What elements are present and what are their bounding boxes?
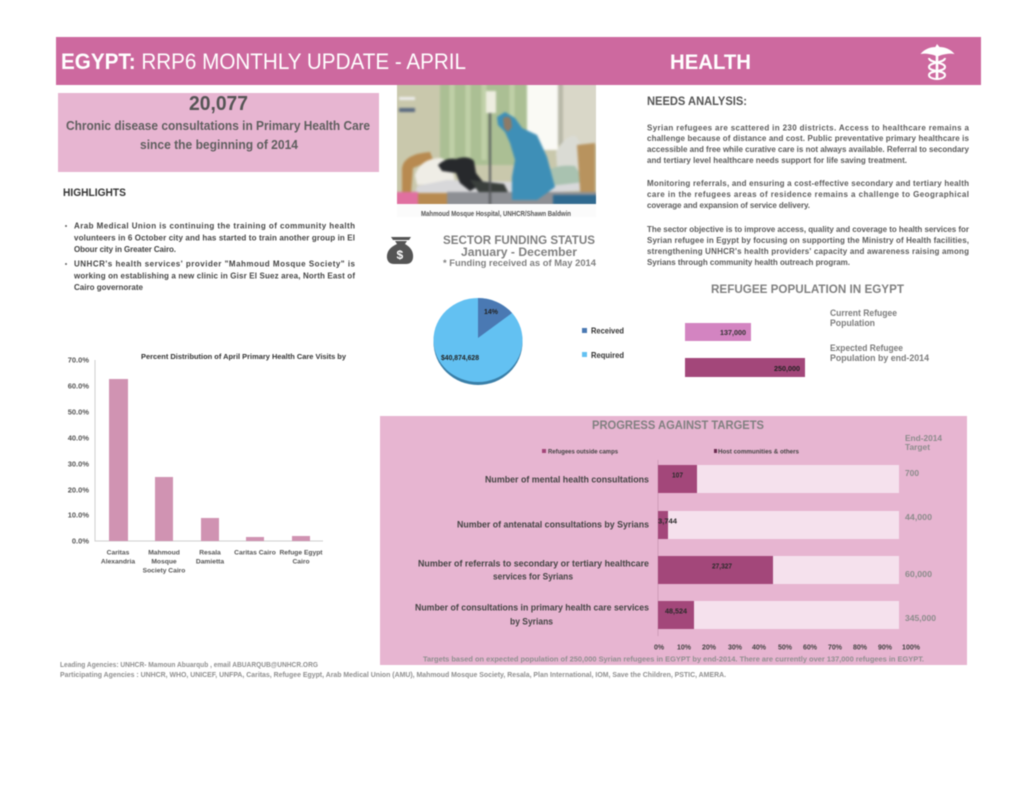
text block: needs analysis: coverage and expansion of service delivery. [647, 201, 810, 210]
text block: needs analysis: accessible and free while curative care is not always available. Referral to secondary [647, 145, 970, 154]
footer: agencies [60, 662, 726, 679]
text block: needs analysis: Syrian refugees are scattered in 230 districts. Access to healthcare remains a [647, 124, 970, 132]
text block: highlights: Cairo governorate [74, 283, 144, 292]
target values: 700 [905, 468, 919, 478]
bar chart: percent distribution of visits: Mosque [151, 558, 177, 566]
target column header [905, 433, 942, 452]
footer: agencies: Leading Agencies: UNHCR- Mamoun Abuarqub , email ABUARQUB@UNHCR.ORG [60, 662, 319, 669]
legend [542, 448, 799, 456]
title: EGYPT: RRP6 MONTHLY UPDATE - APRIL [61, 49, 466, 74]
percent axis: 80% [853, 644, 868, 652]
photo caption [397, 204, 596, 218]
pie legend: Received [591, 326, 624, 336]
footer: agencies: Participating Agencies : UNHCR, WHO, UNICEF, UNFPA, Caritas, Refugee Egypt, Arab Medical Union (AMU), Mahmoud Mosque Society, Resala, Plan International, IOM, Save the Children, PSTIC, AMERA. [60, 672, 726, 679]
pie chart: funding [434, 298, 522, 385]
icon: caduceus [920, 44, 954, 80]
chart title: Percent Distribution of April Primary Health Care Visits by [141, 352, 347, 361]
pie legend [582, 326, 624, 360]
key figure description: Chronic disease consultations in Primary Health Care [66, 119, 370, 133]
pie legend: Required [591, 350, 624, 360]
text block: needs analysis: strengthening UNHCR's health providers' capacity and awareness raising among [647, 247, 969, 256]
bar chart: percent distribution of visits: Resala [199, 550, 221, 556]
photo caption: Mahmoud Mosque Hospital, UNHCR/Shawn Baldwin [421, 211, 571, 218]
heading: sector funding status: SECTOR FUNDING STATUS [443, 233, 595, 247]
text block: needs analysis: challenge because of distance and cost. Public preventative primary healthcare is [647, 134, 970, 143]
heading: sector funding status [443, 233, 597, 269]
percent axis: 100% [902, 644, 921, 652]
percent axis [654, 644, 921, 652]
row labels: by Syrians [510, 616, 553, 628]
heading: needs analysis: NEEDS ANALYSIS: [647, 94, 747, 108]
key number: 20,077 [189, 93, 248, 115]
percent axis: 10% [677, 644, 692, 652]
percent axis: 50% [778, 644, 793, 652]
percent axis: 0% [654, 644, 665, 652]
progress bars: 48,524 [665, 608, 687, 616]
target values: 60,000 [905, 569, 932, 579]
pie label: required: $40,874,628 [441, 353, 479, 362]
key figure description [66, 119, 370, 152]
row labels [415, 474, 649, 628]
text block: needs analysis: Monitoring referrals, and ensuring a cost-effective secondary and tertiary health [647, 179, 969, 188]
row labels: services for Syrians [493, 572, 573, 582]
bar chart: percent distribution of visits: Alexandria [101, 558, 135, 566]
bar chart: refugee population: 137,000 [720, 328, 746, 337]
percent axis: 60% [803, 644, 818, 652]
bar chart: percent distribution of visits: Refuge Egypt [279, 550, 323, 556]
bar chart: refugee population: 250,000 [774, 364, 800, 373]
percent axis: 90% [878, 644, 893, 652]
target values: 345,000 [905, 613, 936, 623]
bar chart: percent distribution of visits: Cairo [292, 558, 310, 566]
progress bars: 107 [672, 472, 683, 480]
bar chart: percent distribution of visits: 30.0% [68, 460, 89, 468]
row labels: Number of referrals to secondary or tertiary healthcare [418, 558, 649, 570]
bar chart: refugee population: Population [830, 318, 875, 328]
photo: nurse with patient in hospital [396, 84, 597, 205]
bar chart: percent distribution of visits: 20.0% [68, 486, 89, 494]
icon: money bag [387, 237, 413, 264]
bar chart: percent distribution of visits: 10.0% [68, 510, 89, 520]
bar chart: percent distribution of visits: Damietta [196, 558, 224, 566]
text block: needs analysis: The sector objective is to improve access, quality and coverage to health services for [647, 225, 969, 234]
bar chart: percent distribution of visits: 50.0% [68, 408, 89, 416]
text block: needs analysis: Syrians through community health outreach program. [647, 258, 850, 267]
target values [905, 468, 936, 623]
bar chart: percent distribution of visits: Caritas [107, 550, 130, 556]
bar chart: percent distribution of visits: 40.0% [68, 434, 89, 442]
text block: highlights: working on establishing a new clinic in Gisr El Suez area, North East of [73, 272, 355, 280]
bar chart: percent distribution of visits: 0.0% [72, 536, 89, 546]
bar chart: percent distribution of visits: Caritas Cairo [234, 550, 276, 556]
bar chart: refugee population: Population by end-2014 [830, 353, 929, 363]
bar chart: percent distribution of visits: 70.0% [68, 356, 89, 364]
text block: highlights: Arab Medical Union is continuing the training of community health [74, 222, 355, 230]
text block: needs analysis: and tertiary level healthcare needs support for life saving treatment. [647, 156, 907, 165]
percent axis: 30% [728, 644, 743, 652]
heading: highlights: HIGHLIGHTS [63, 187, 126, 199]
text block: needs analysis: Syrian refugee in Egypt by focusing on supporting the Ministry of Health facilities, [647, 236, 969, 245]
pie slice: received [478, 298, 512, 338]
row labels: Number of antenatal consultations by Syrians [457, 520, 649, 530]
text block: highlights: UNHCR's health services' provider "Mahmoud Mosque Society" is [74, 260, 356, 268]
bar chart: refugee population: Expected Refugee [830, 343, 903, 353]
text block: highlights: volunteers in 6 October city and has started to train another group in El [74, 234, 355, 242]
progress bars: 27,327 [712, 564, 732, 570]
percent axis: 70% [828, 644, 843, 652]
legend: Host communities & others [718, 448, 799, 456]
bar chart: refugee population: Current Refugee [830, 308, 897, 318]
bar chart: percent distribution of visits: 60.0% [68, 382, 89, 390]
bar chart: percent distribution of visits: Society Cairo [143, 568, 185, 574]
bar chart: percent distribution of visits [68, 352, 347, 574]
sector name: HEALTH [670, 51, 751, 74]
icon: money bag: $ [396, 248, 404, 262]
legend: Refugees outside camps [548, 448, 618, 456]
heading: sector funding status: * Funding received as of May 2014 [443, 258, 597, 269]
text block: needs analysis: care in the refugees areas of residence remains a challenge to Geographical [647, 190, 969, 199]
heading: sector funding status: January - December [461, 245, 577, 259]
panel heading: PROGRESS AGAINST TARGETS [592, 418, 764, 432]
text block: highlights [65, 222, 356, 292]
pie label: received: 14% [484, 307, 498, 316]
panel: progress against targets [380, 416, 967, 665]
row labels: Number of consultations in primary health care services [415, 602, 649, 614]
text block: needs analysis [647, 124, 970, 267]
heading: refugee population: REFUGEE POPULATION IN EGYPT [711, 282, 905, 296]
target column header: End-2014 [905, 433, 942, 443]
row labels: Number of mental health consultations [485, 474, 649, 486]
percent axis: 40% [752, 644, 767, 652]
targets note: Targets based on expected population of 250,000 Syrian refugees in EGYPT by end-2014. There are currently over 137,000 refugees in EGYPT. [423, 654, 924, 664]
target column header: Target [905, 442, 930, 452]
header banner [56, 37, 981, 85]
percent axis: 20% [702, 644, 717, 652]
target values: 44,000 [905, 512, 932, 522]
key figure description: since the beginning of 2014 [140, 138, 298, 152]
panel: key figure [58, 93, 379, 172]
text block: highlights: Obour city in Greater Cairo. [74, 245, 176, 254]
bar chart: refugee population [685, 308, 929, 377]
progress bars [658, 460, 899, 636]
progress bars: 3,744 [658, 518, 677, 526]
bar chart: percent distribution of visits: Mahmoud [148, 550, 180, 556]
